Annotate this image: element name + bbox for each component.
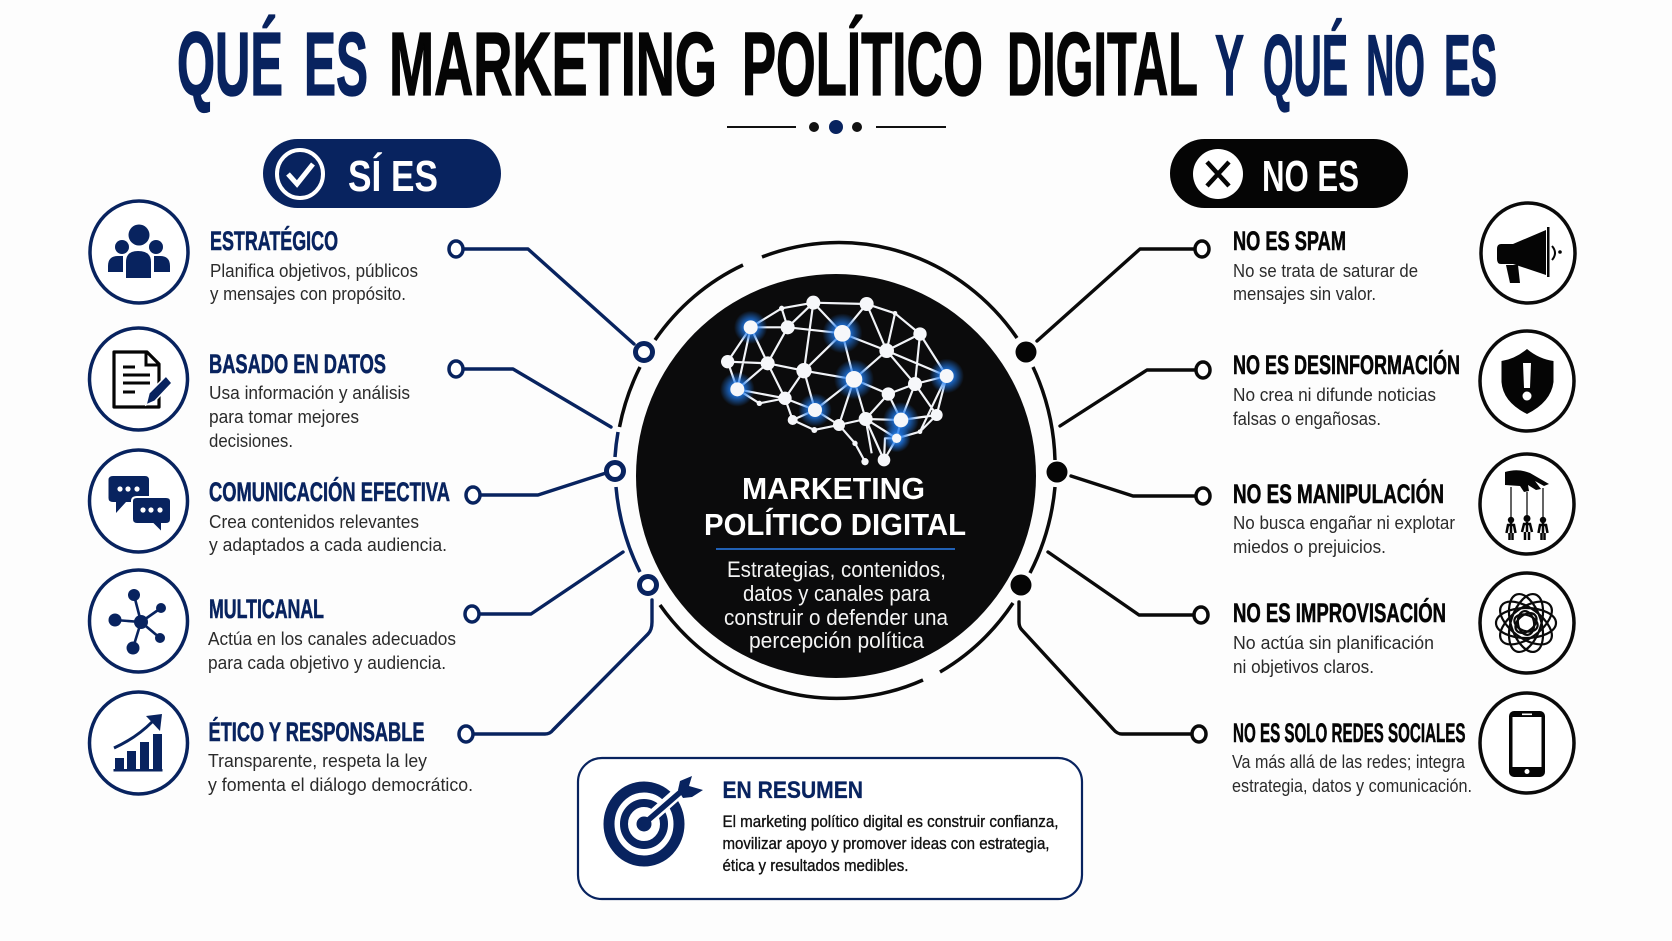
description: Planifica objetivos, públicos: [210, 260, 418, 281]
description: No se trata de saturar de: [1233, 260, 1418, 281]
summary text: [722, 813, 1058, 875]
description: decisiones.: [209, 430, 293, 451]
hub heading: POLÍTICO DIGITAL: [704, 507, 966, 542]
summary text: ética y resultados medibles.: [722, 857, 908, 875]
description: No busca engañar ni explotar: [1233, 512, 1455, 533]
connector lines: left: [463, 249, 652, 734]
icon: people: [90, 201, 188, 303]
title: QUÉ: [1263, 18, 1348, 114]
description: para cada objetivo y audiencia.: [208, 652, 446, 673]
connector end: [1194, 607, 1208, 623]
description: y fomenta el diálogo democrático.: [208, 774, 473, 795]
description: Usa información y análisis: [209, 382, 410, 403]
panel: en resumen: [578, 758, 1082, 899]
badge: no es: [1170, 139, 1408, 208]
connector end: [466, 487, 480, 503]
title: QUÉ: [177, 14, 283, 115]
heading: NO ES IMPROVISACIÓN: [1233, 597, 1446, 628]
heading: COMUNICACIÓN EFECTIVA: [209, 476, 450, 507]
hub description: construir o defender una: [724, 605, 949, 630]
connector end: [449, 241, 463, 257]
description: ni objetivos claros.: [1233, 656, 1374, 677]
connector end: [465, 606, 479, 622]
description: falsas o engañosas.: [1233, 408, 1381, 429]
title: Y: [1215, 18, 1244, 114]
hub description: Estrategias, contenidos,: [727, 557, 946, 582]
connector lines: right: [1019, 249, 1196, 734]
left item: estratégico: [90, 201, 463, 304]
connector end: [1195, 241, 1209, 257]
right item: no es desinformación: [1196, 331, 1574, 431]
icon: growth chart: [90, 692, 188, 794]
title: MARKETING: [389, 15, 717, 115]
connector end: [459, 726, 473, 742]
right item: no es improvisación: [1194, 573, 1574, 677]
description: miedos o prejuicios.: [1233, 536, 1386, 557]
description: Transparente, respeta la ley: [208, 750, 428, 771]
description: [210, 260, 418, 304]
title: ES: [304, 15, 368, 115]
connector end: [449, 361, 463, 377]
right item: no es manipulación: [1196, 454, 1574, 557]
ring nodes: black: [1010, 342, 1068, 596]
icon: chat bubbles: [90, 450, 188, 552]
icon: neural brain: [720, 296, 964, 466]
icon: network: [90, 570, 188, 672]
description: estrategia, datos y comunicación.: [1232, 775, 1472, 796]
title: POLÍTICO: [742, 14, 983, 115]
description: Va más allá de las redes; integra: [1232, 751, 1466, 772]
left item: ético y responsable: [90, 692, 473, 795]
heading: NO ES SPAM: [1233, 226, 1346, 256]
icon: megaphone: [1481, 203, 1575, 303]
hub heading: MARKETING: [742, 471, 925, 506]
icon: document and pencil: [90, 328, 188, 430]
left item: basado en datos: [90, 328, 463, 451]
connector end: [1196, 362, 1210, 378]
description: [208, 750, 473, 795]
description: [209, 511, 447, 555]
ring nodes: navy: [606, 344, 656, 594]
summary text: movilizar apoyo y promover ideas con estrategia,: [722, 835, 1050, 853]
description: y mensajes con propósito.: [210, 283, 406, 304]
hub disc: [636, 274, 1036, 678]
left item: comunicación efectiva: [90, 450, 480, 555]
title divider: [727, 120, 946, 134]
icon: puppeteer hand: [1480, 454, 1574, 554]
heading: ÉTICO Y RESPONSABLE: [208, 716, 424, 747]
icon: smartphone: [1480, 693, 1574, 793]
heading: ESTRATÉGICO: [210, 225, 338, 256]
heading: MULTICANAL: [209, 594, 324, 624]
summary text: El marketing político digital es construir confianza,: [722, 813, 1058, 831]
description: [1233, 632, 1434, 677]
hub description: [724, 557, 949, 653]
right item: no es spam: [1195, 203, 1575, 304]
right item: no es solo redes sociales: [1192, 693, 1574, 796]
description: No actúa sin planificación: [1233, 632, 1434, 653]
description: para tomar mejores: [209, 406, 359, 427]
description: [1233, 512, 1455, 557]
icon: target with dart: [609, 776, 703, 861]
description: Crea contenidos relevantes: [209, 511, 419, 532]
icon: tangled scribble: [1480, 573, 1574, 673]
description: [1232, 751, 1472, 796]
hub divider: [716, 548, 955, 550]
heading: NO ES MANIPULACIÓN: [1233, 478, 1444, 509]
connector end: [1196, 488, 1210, 504]
infographic canvas: ES: [1444, 18, 1497, 114]
description: No crea ni difunde noticias: [1233, 384, 1436, 405]
description: Actúa en los canales adecuados: [208, 628, 456, 649]
description: mensajes sin valor.: [1233, 283, 1376, 304]
hub description: datos y canales para: [743, 581, 931, 606]
left item: multicanal: [90, 570, 479, 673]
title: DIGITAL: [1007, 15, 1198, 115]
hub description: percepción política: [749, 628, 925, 653]
connector end: [1192, 726, 1206, 742]
heading: NO ES SOLO REDES SOCIALES: [1233, 718, 1466, 748]
heading: BASADO EN DATOS: [209, 349, 386, 379]
badge: sí es: [263, 139, 501, 208]
description: y adaptados a cada audiencia.: [209, 534, 447, 555]
heading: NO ES DESINFORMACIÓN: [1233, 349, 1460, 380]
title: [177, 14, 1497, 115]
icon: warning shield: [1480, 331, 1574, 431]
description: [1233, 384, 1436, 429]
description: [209, 382, 410, 451]
description: [1233, 260, 1418, 304]
description: [208, 628, 456, 673]
hub ring: [615, 243, 1055, 698]
badge: sí es: SÍ ES: [348, 151, 438, 201]
badge: no es: NO ES: [1262, 152, 1359, 201]
hub heading: [704, 471, 966, 542]
central hub: [606, 243, 1068, 698]
title: NO: [1366, 18, 1425, 114]
summary heading: EN RESUMEN: [722, 777, 863, 804]
